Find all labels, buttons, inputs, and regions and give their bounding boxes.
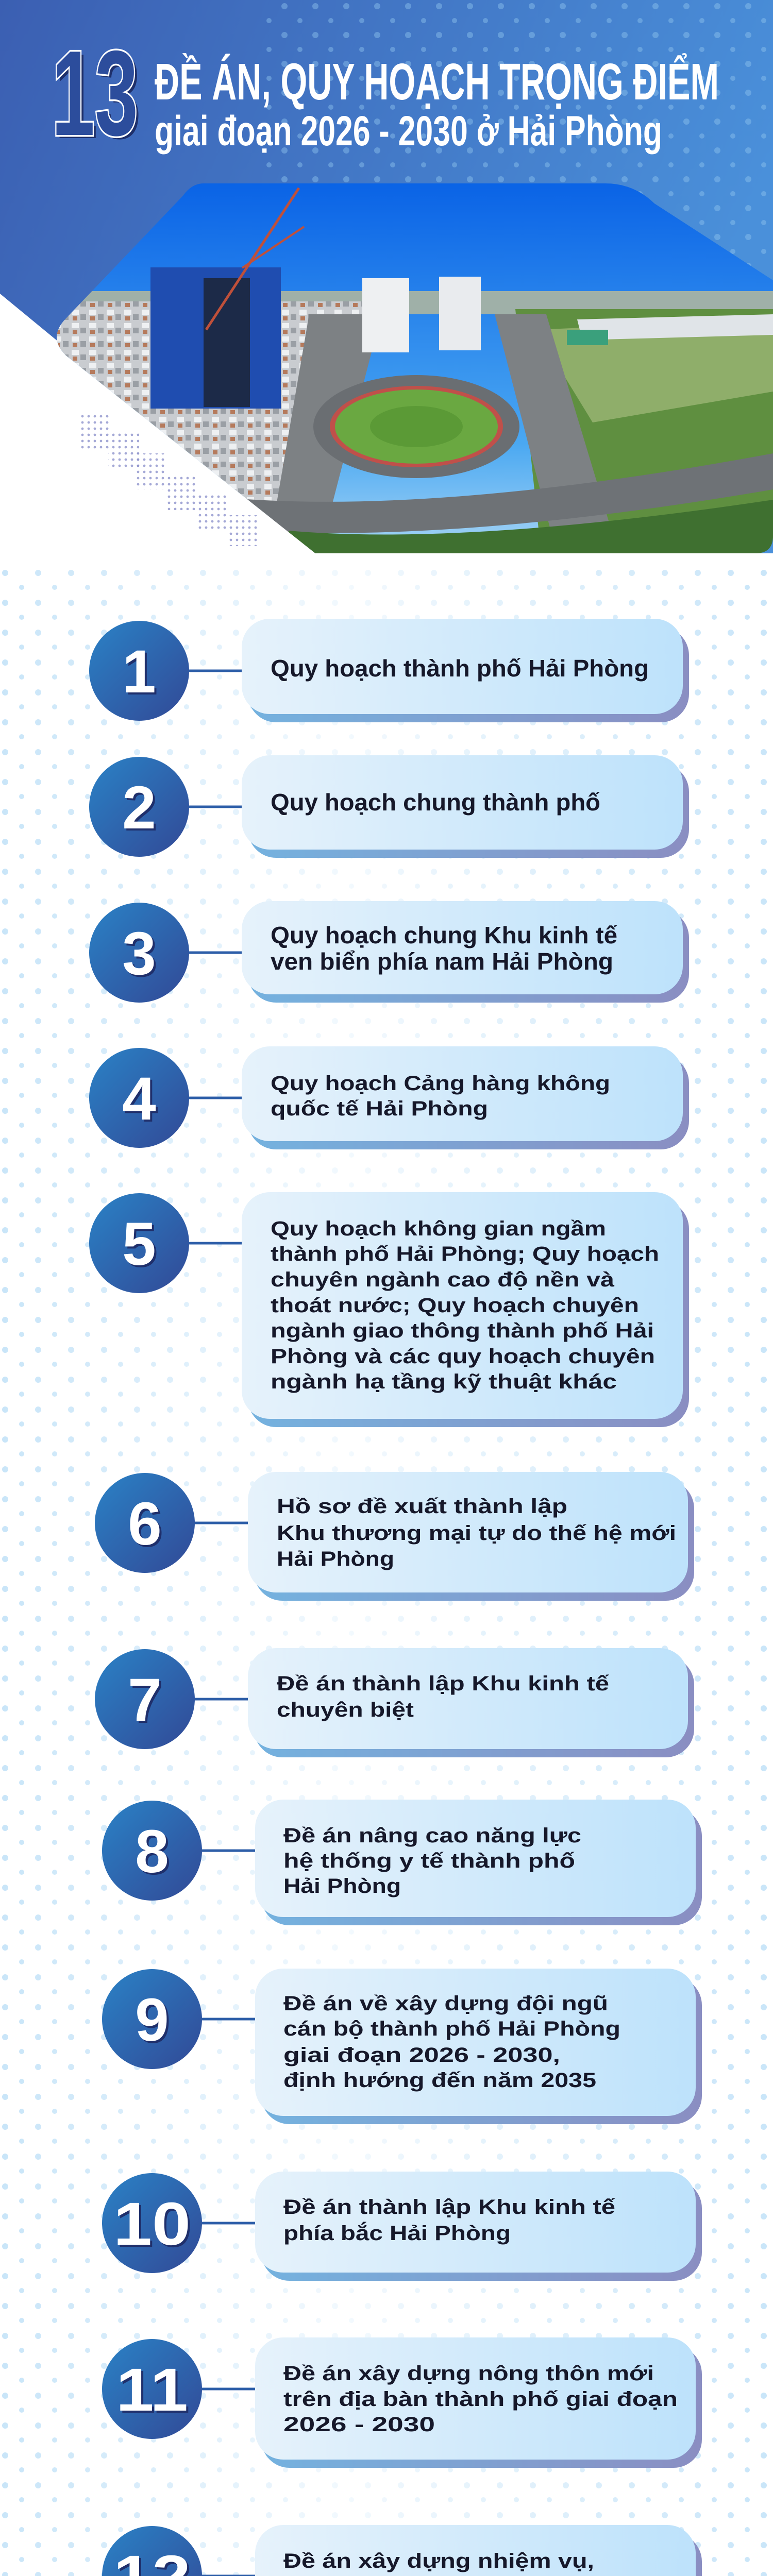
number 1	[89, 621, 189, 721]
number 6: 6	[128, 1490, 162, 1558]
item 9	[102, 1969, 702, 2124]
item 12: Đề án xây dựng nhiệm vụ,	[283, 2550, 594, 2572]
number 10	[102, 2173, 202, 2273]
number 12	[102, 2526, 202, 2576]
number 3: 3	[124, 922, 158, 990]
item 4: Quy hoạch Cảng hàng không	[271, 1072, 610, 1095]
item 8: Đề án nâng cao năng lực	[283, 1824, 581, 1847]
item 8: Hải Phòng	[283, 1875, 401, 1897]
title: big 13: 13	[55, 28, 141, 164]
item 9: cán bộ thành phố Hải Phòng	[283, 2018, 620, 2040]
number 8: 8	[137, 1820, 171, 1888]
item 5: thành phố Hải Phòng; Quy hoạch	[271, 1243, 659, 1265]
number 6	[95, 1473, 195, 1573]
number 7: 7	[128, 1666, 162, 1734]
item 10	[102, 2172, 702, 2281]
item 6: Khu thương mại tự do thế hệ mới	[277, 1522, 676, 1545]
number 11	[102, 2339, 202, 2439]
number 4: 4	[124, 1067, 158, 1135]
title text	[155, 53, 719, 155]
item 3: ven biển phía nam Hải Phòng	[271, 948, 613, 975]
number 9	[102, 1969, 202, 2069]
item 10: Đề án thành lập Khu kinh tế	[283, 2196, 616, 2218]
number 6: 6	[130, 1492, 164, 1560]
item 11: trên địa bàn thành phố giai đoạn	[283, 2388, 678, 2411]
number 3: 3	[122, 920, 156, 988]
title: big 13	[52, 25, 141, 164]
number 7	[95, 1649, 195, 1749]
number 9: 9	[135, 1986, 169, 2054]
item 7: Đề án thành lập Khu kinh tế	[277, 1672, 610, 1695]
number 4	[89, 1048, 189, 1148]
item 12	[102, 2525, 702, 2576]
number 9: 9	[137, 1988, 171, 2056]
number 8	[102, 1801, 202, 1901]
number 5: 5	[122, 1210, 156, 1278]
item 5: ngành giao thông thành phố Hải	[271, 1319, 654, 1342]
number 3	[89, 903, 189, 1003]
item 1: Quy hoạch thành phố Hải Phòng	[271, 655, 649, 682]
item 5: thoát nước; Quy hoạch chuyên	[271, 1294, 639, 1317]
item 5	[89, 1192, 689, 1427]
number 1: 1	[122, 638, 156, 706]
number 7: 7	[130, 1668, 164, 1736]
item 8: hệ thống y tế thành phố	[283, 1850, 575, 1872]
number 10: 10	[115, 2192, 193, 2260]
item 2: Quy hoạch chung thành phố	[271, 789, 600, 816]
item 5: chuyên ngành cao độ nền và	[271, 1268, 615, 1291]
item 9: Đề án về xây dựng đội ngũ	[283, 1992, 608, 2015]
item 7: chuyên biệt	[277, 1699, 414, 1721]
number 5	[89, 1193, 189, 1293]
item 4	[89, 1046, 689, 1149]
header background	[0, 0, 773, 553]
number 4: 4	[122, 1065, 156, 1133]
number 11: 11	[116, 2356, 188, 2424]
item 11	[102, 2337, 702, 2468]
item 3	[89, 901, 689, 1003]
number 2: 2	[122, 774, 156, 842]
number 2	[89, 757, 189, 857]
item 8	[102, 1800, 702, 1925]
number 8: 8	[135, 1818, 169, 1886]
item 5: Phòng và các quy hoạch chuyên	[271, 1345, 655, 1368]
content background dots	[0, 567, 773, 2576]
number 11: 11	[118, 2358, 190, 2426]
number 1: 1	[124, 640, 158, 708]
number 5: 5	[124, 1212, 158, 1280]
item 4: quốc tế Hải Phòng	[271, 1097, 488, 1120]
number 2: 2	[124, 776, 158, 844]
decorative dot grids	[80, 415, 258, 546]
item 9: giai đoạn 2026 - 2030,	[283, 2044, 560, 2066]
item 11: Đề án xây dựng nông thôn mới	[283, 2362, 654, 2385]
item 10: phía bắc Hải Phòng	[283, 2221, 511, 2245]
item 9: định hướng đến năm 2035	[283, 2069, 596, 2092]
item 7	[95, 1648, 694, 1757]
item 11: 2026 - 2030	[283, 2413, 435, 2436]
item 6: Hải Phòng	[277, 1548, 394, 1570]
photo: aerial view of roundabout and city	[46, 183, 773, 554]
item 5: Quy hoạch không gian ngầm	[271, 1217, 606, 1240]
item 5: ngành hạ tầng kỹ thuật khác	[271, 1370, 617, 1393]
item 2	[89, 755, 689, 858]
item 3: Quy hoạch chung Khu kinh tế	[271, 922, 617, 948]
item 6	[95, 1472, 694, 1601]
number 10: 10	[113, 2190, 191, 2258]
item 6: Hồ sơ đề xuất thành lập	[277, 1495, 567, 1518]
item 1	[89, 619, 689, 722]
title: big 13: 13	[52, 25, 138, 161]
